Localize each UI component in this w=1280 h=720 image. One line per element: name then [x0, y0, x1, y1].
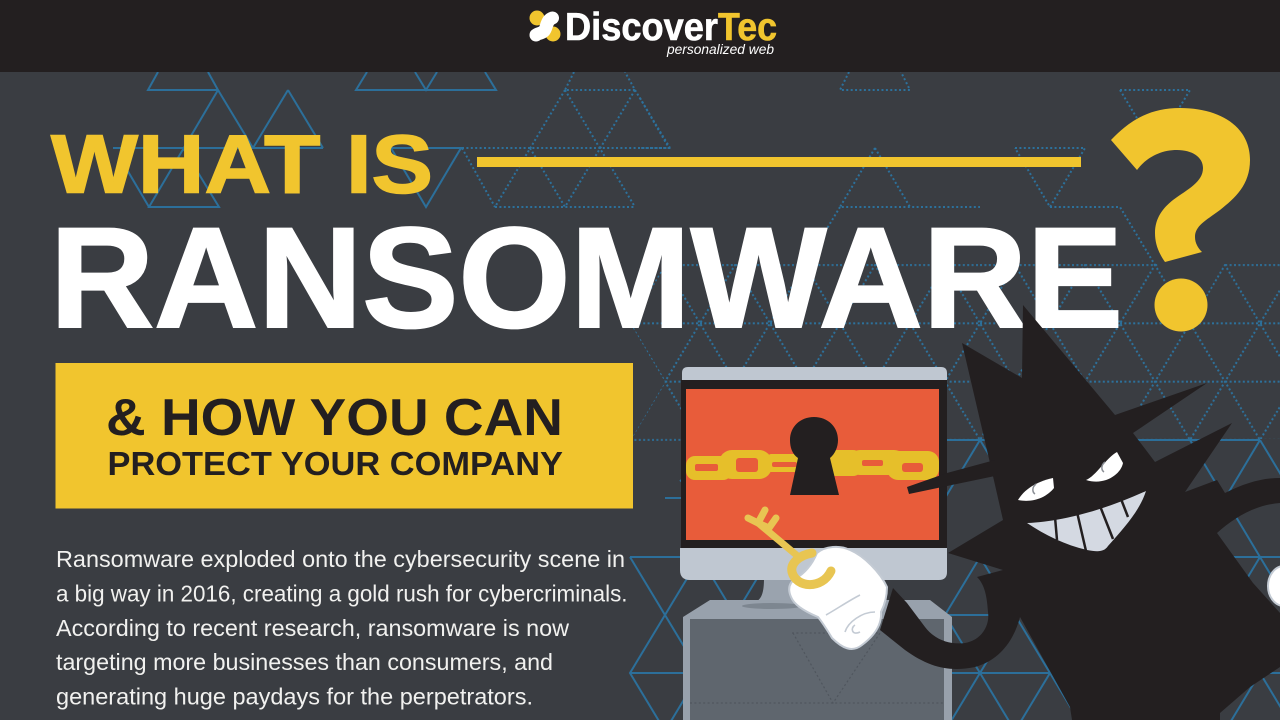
subtitle panel: PROTECT YOUR COMPANY	[108, 445, 563, 482]
title: WHAT IS: WHAT IS	[51, 118, 433, 210]
intro paragraph: According to recent research, ransomware is now	[56, 615, 569, 641]
header bar	[0, 0, 1280, 72]
intro paragraph	[56, 546, 628, 710]
eyes	[1018, 478, 1054, 501]
intro paragraph: targeting more businesses than consumers, and	[56, 649, 553, 675]
intro paragraph: a big way in 2016, creating a gold rush for cybercriminals.	[56, 580, 628, 606]
illustration: computer	[680, 367, 952, 720]
subtitle panel: & HOW YOU CAN	[106, 389, 563, 447]
logo: DiscoverTec: Discover	[565, 6, 718, 49]
illustration: key ring	[792, 553, 831, 585]
keyhole	[790, 417, 839, 495]
intro paragraph: generating huge paydays for the perpetrators.	[56, 684, 533, 710]
title: RANSOMWARE: RANSOMWARE	[50, 199, 1123, 358]
screen	[686, 389, 939, 540]
question mark	[1111, 108, 1250, 332]
logo: DiscoverTec: personalized web	[666, 41, 774, 57]
pointing nose	[907, 460, 995, 494]
illustration: villain	[880, 305, 1280, 720]
subtitle panel	[56, 363, 633, 508]
title rule	[477, 157, 1081, 167]
intro paragraph: Ransomware exploded onto the cybersecurity scene in	[56, 546, 625, 572]
teeth	[1027, 491, 1146, 551]
illustration: gloved hand	[789, 547, 887, 649]
logo: DiscoverTec: Tec	[718, 6, 777, 49]
chain	[686, 450, 939, 480]
body and hood silhouette	[880, 305, 1280, 720]
illustration: key shaft	[748, 510, 800, 558]
illustration: second glove	[1268, 566, 1280, 606]
logo: DiscoverTec	[530, 6, 777, 57]
